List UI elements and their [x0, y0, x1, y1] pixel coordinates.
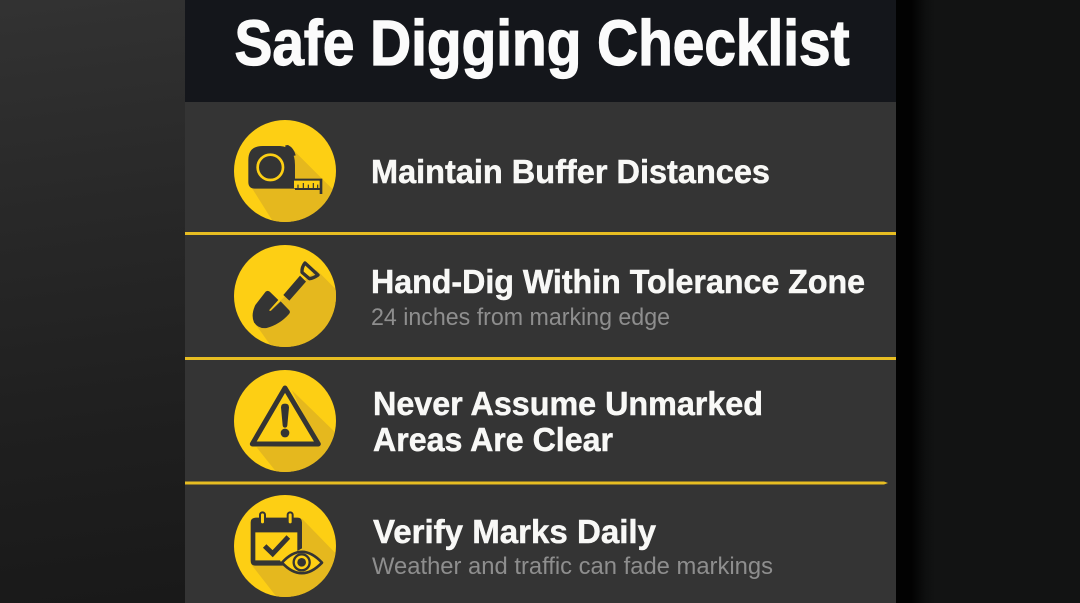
divider lines: [185, 232, 896, 484]
icon: tape measure: [234, 120, 336, 222]
heading: Verify Marks Daily: [373, 513, 657, 550]
subtext: 24 inches from marking edge: [371, 304, 670, 331]
heading: Never Assume Unmarked: [373, 385, 763, 422]
item 3: never assume unmarked areas are clear: [234, 370, 762, 472]
icon: calendar with eye: [234, 495, 336, 597]
icon: shovel: [234, 245, 336, 347]
subtext: Weather and traffic can fade markings: [372, 553, 773, 580]
title: Safe Digging Checklist: [234, 7, 850, 79]
header band: [185, 0, 896, 102]
item 1: maintain buffer distances: [234, 120, 769, 222]
heading line 2: Areas Are Clear: [373, 421, 613, 458]
heading: Hand-Dig Within Tolerance Zone: [371, 263, 865, 300]
panel: checklist: [185, 0, 896, 603]
heading: Maintain Buffer Distances: [371, 153, 770, 190]
item 4: verify marks daily: [234, 495, 773, 603]
item 2: hand-dig within tolerance zone: [234, 245, 864, 347]
icon: warning triangle: [234, 370, 336, 472]
